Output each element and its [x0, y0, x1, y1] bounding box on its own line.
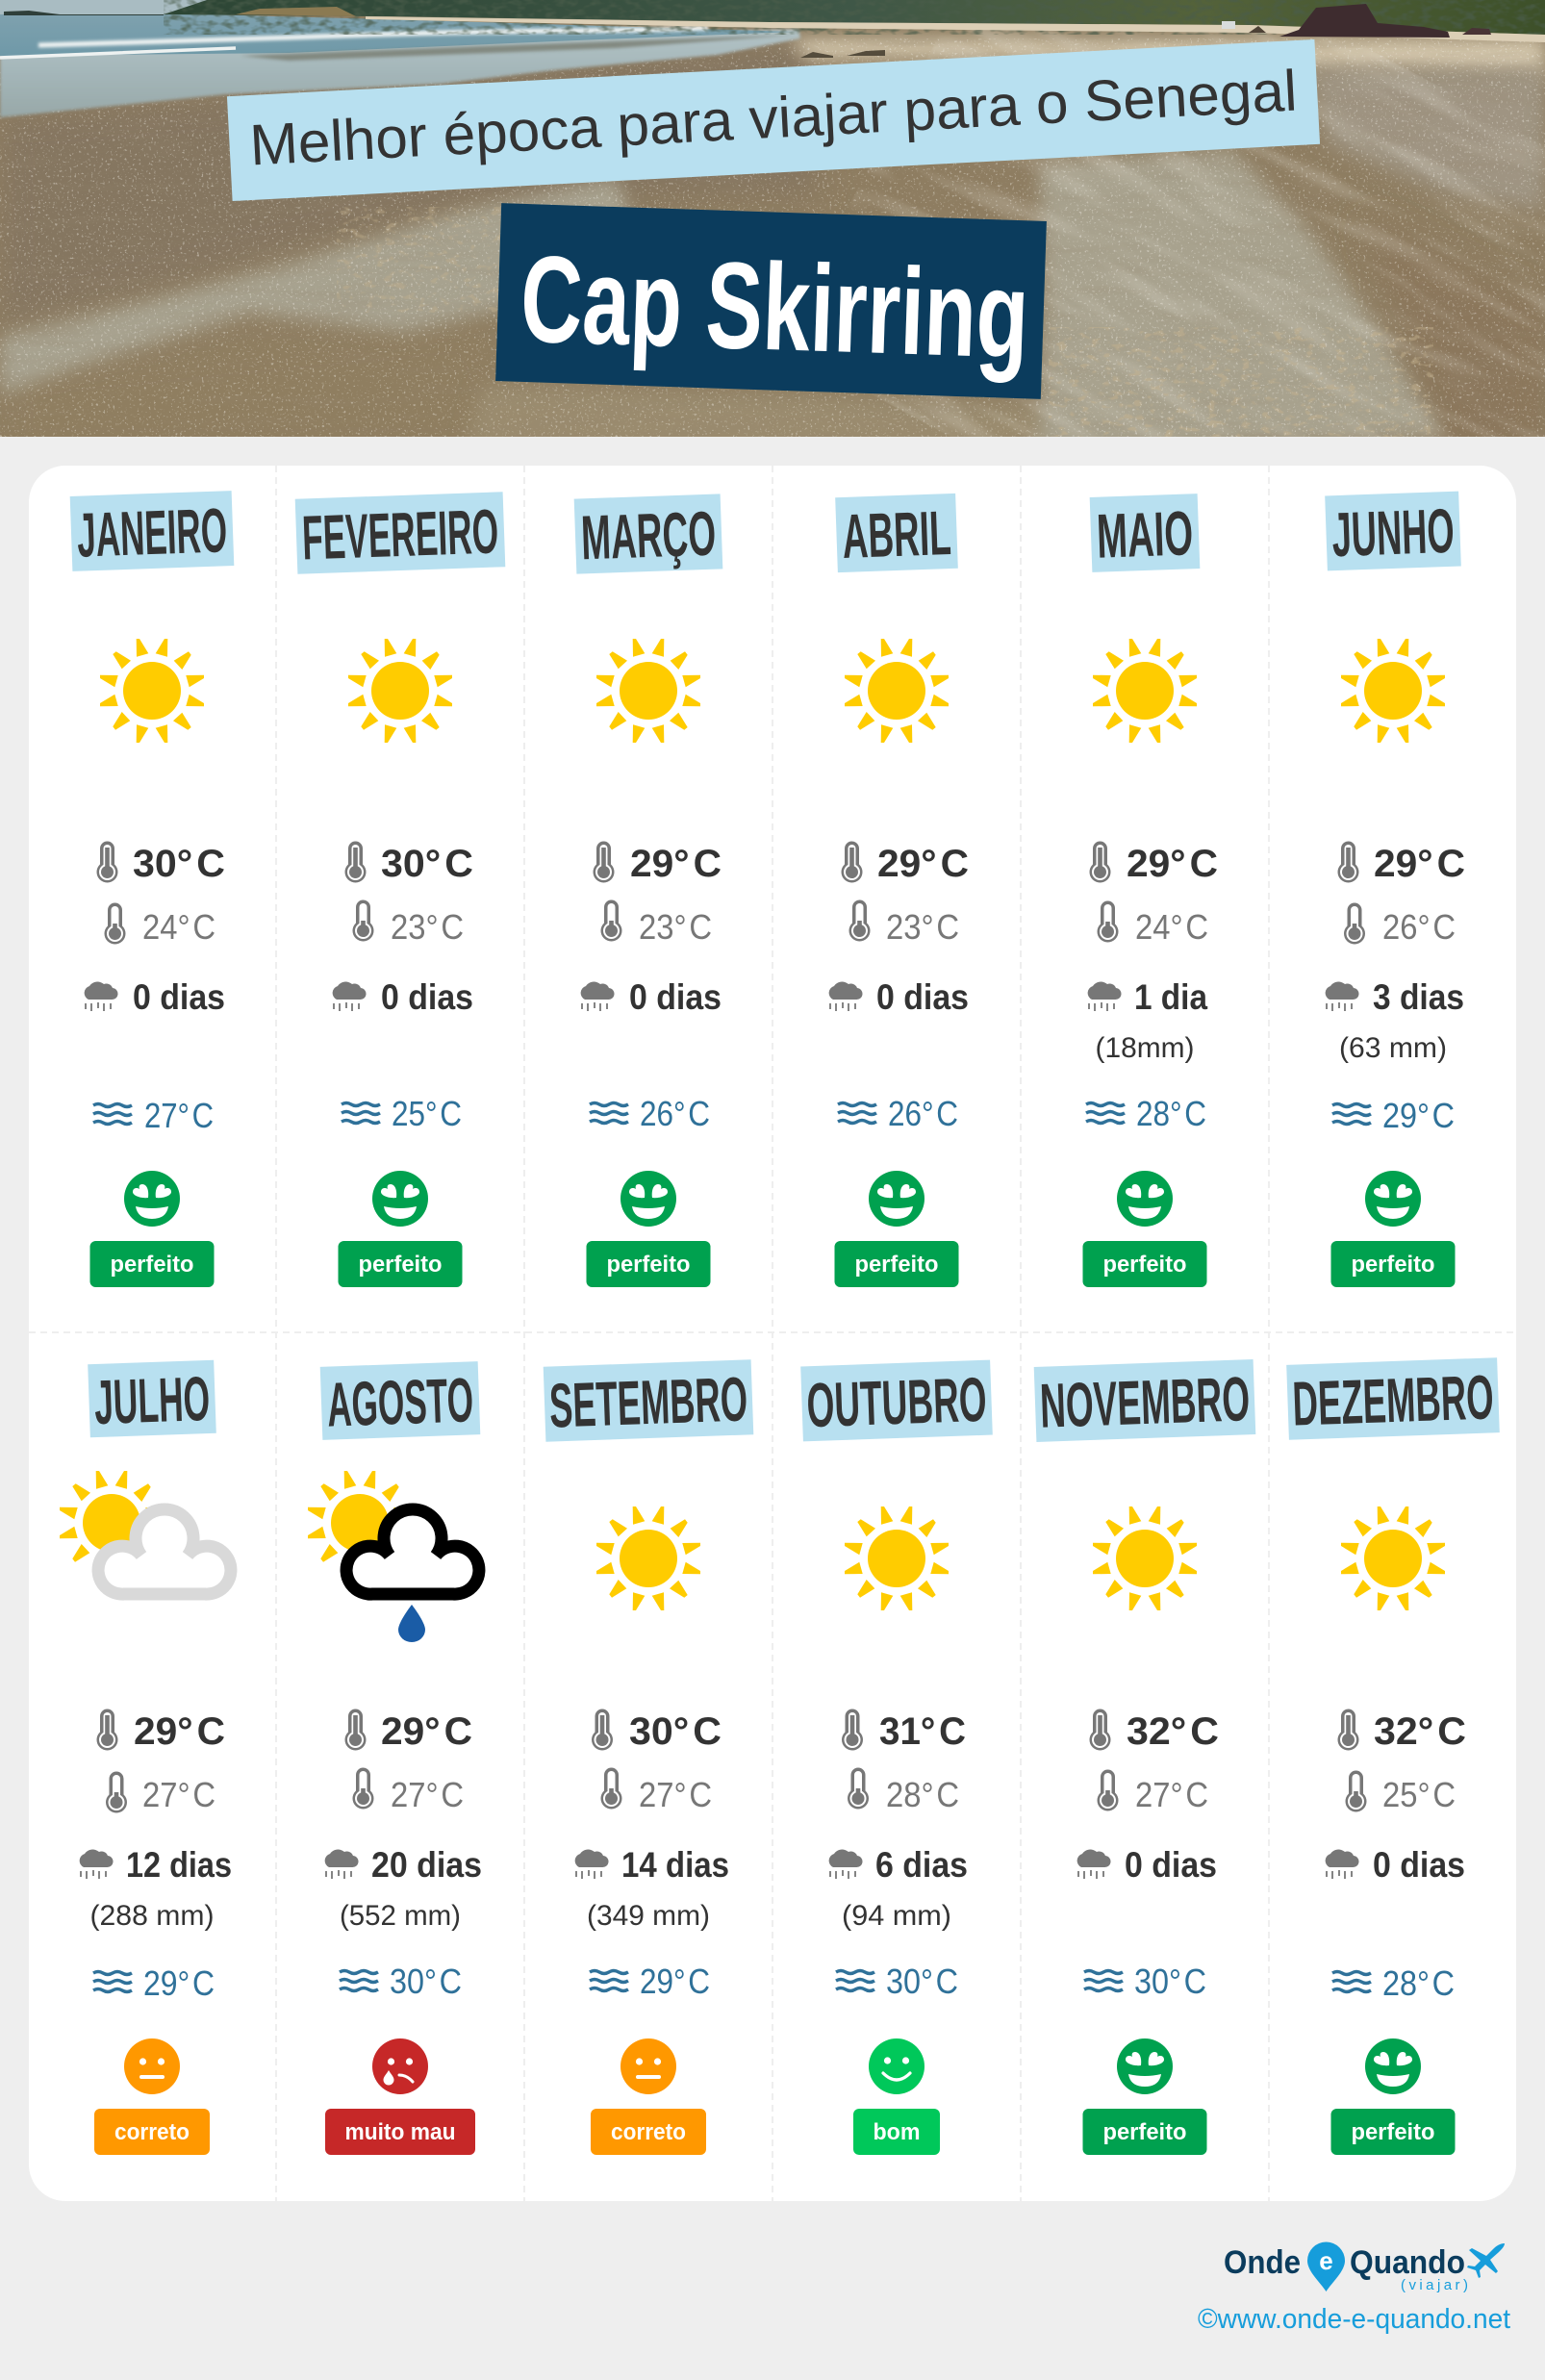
sea temperature [93, 1963, 215, 2003]
icon: sun, black cloud and rain drop [308, 1471, 479, 1642]
label: MARÇO: MARÇO [580, 498, 717, 572]
min temperature [600, 900, 712, 947]
label: FEVEREIRO [295, 492, 505, 574]
rating badge: perfeito [1083, 2109, 1206, 2155]
icon: map pin with e [1307, 2241, 1345, 2291]
month: dezembro [1286, 1357, 1500, 2155]
icon: sun [596, 1506, 700, 1610]
rating face [1365, 2038, 1421, 2094]
rating badge: perfeito [1083, 1241, 1206, 1287]
icon: sun [1093, 1506, 1197, 1610]
max temperature: 30°C [133, 843, 225, 885]
rain days [1326, 1845, 1465, 1885]
rating badge: correto: correto [114, 2119, 190, 2145]
icon: sun [1341, 639, 1445, 743]
rating badge: perfeito: perfeito [1102, 1252, 1187, 1278]
sea temperature [590, 1962, 710, 2001]
rating face [869, 2038, 924, 2094]
rain days [1088, 977, 1207, 1017]
logo word: Onde: Onde [1224, 2244, 1301, 2281]
label: FEVEREIRO: FEVEREIRO [301, 495, 499, 573]
rating badge: correto [94, 2109, 210, 2155]
min temperature: 24°C [1135, 907, 1208, 947]
rating badge: perfeito: perfeito [110, 1252, 194, 1278]
month: julho [60, 1360, 232, 2155]
heading: Cap Skirring: Cap Skirring [519, 230, 1031, 385]
max temperature [1337, 841, 1465, 885]
rain days [1077, 1845, 1217, 1885]
rating face [1365, 1171, 1421, 1227]
min temperature: 27°C [391, 1775, 464, 1814]
label: JANEIRO: JANEIRO [76, 494, 228, 570]
month: novembro [1034, 1359, 1255, 2155]
rain days [581, 977, 722, 1017]
sea temperature [1084, 1962, 1206, 2001]
sea temperature [342, 1094, 462, 1133]
sea temperature [590, 1094, 710, 1133]
max temperature: 32°C [1127, 1710, 1219, 1753]
min temperature: 23°C [391, 907, 464, 947]
rating badge: bom [853, 2109, 940, 2155]
max temperature: 29°C [630, 843, 722, 885]
max temperature [344, 1709, 472, 1753]
icon: sun [1093, 639, 1197, 743]
sea temperature: 30°C [390, 1962, 462, 2001]
rain amount: (288 mm) [90, 1900, 214, 1932]
rating face [869, 1171, 924, 1227]
rain days: 1 dia [1134, 977, 1207, 1017]
min temperature [848, 1768, 959, 1814]
rating face [372, 1171, 428, 1227]
label: ABRIL: ABRIL [841, 497, 952, 571]
max temperature [1089, 841, 1218, 885]
label: ABRIL [835, 494, 958, 572]
sea temperature [93, 1096, 214, 1135]
rain days [1326, 977, 1464, 1017]
rain days [85, 977, 225, 1017]
rating badge: perfeito: perfeito [1351, 1252, 1435, 1278]
website credit: ©www.onde-e-quando.net [1198, 2304, 1510, 2335]
rain days: 0 dias [876, 977, 969, 1017]
min temperature [1097, 900, 1208, 947]
icon: sun [596, 639, 700, 743]
max temperature [592, 1709, 722, 1753]
rating badge: perfeito [835, 1241, 958, 1287]
min temperature [848, 900, 959, 947]
label: MAIO: MAIO [1096, 497, 1194, 571]
sea temperature: 29°C [143, 1963, 215, 2003]
sea temperature: 28°C [1382, 1963, 1455, 2003]
rating face [1117, 2038, 1173, 2094]
month: março [574, 494, 722, 1287]
sea temperature: 26°C [640, 1094, 710, 1133]
label: AGOSTO [320, 1361, 480, 1440]
max temperature [96, 1709, 225, 1753]
rating badge: perfeito: perfeito [358, 1252, 443, 1278]
month: abril [829, 494, 969, 1287]
max temperature: 30°C [381, 843, 473, 885]
rain amount: (552 mm) [340, 1900, 461, 1932]
sea temperature [1332, 1096, 1455, 1135]
month: maio [1083, 494, 1218, 1287]
min temperature: 27°C [639, 1775, 712, 1814]
heading: Cap Skirring [495, 203, 1047, 399]
rating badge: perfeito: perfeito [854, 1252, 939, 1278]
rating face [621, 2038, 676, 2094]
rain days [575, 1845, 729, 1885]
label: AGOSTO: AGOSTO [326, 1364, 474, 1440]
rain days: 12 dias [126, 1845, 232, 1885]
icon: sun behind grey cloud [60, 1471, 231, 1594]
icon: sun [845, 639, 949, 743]
max temperature [1337, 1709, 1466, 1753]
rating face [1117, 1171, 1173, 1227]
month: janeiro [70, 491, 234, 1287]
rain amount: (94 mm) [842, 1900, 951, 1932]
rain days: 14 dias [621, 1845, 729, 1885]
sea temperature [836, 1962, 958, 2001]
icon: sun [1341, 1506, 1445, 1610]
rain days [829, 977, 969, 1017]
rain days: 0 dias [381, 977, 473, 1017]
label: NOVEMBRO: NOVEMBRO [1039, 1363, 1251, 1441]
min temperature: 25°C [1382, 1775, 1456, 1814]
sea temperature: 30°C [886, 1962, 958, 2001]
rating badge: perfeito: perfeito [606, 1252, 691, 1278]
icon: sun [845, 1506, 949, 1610]
rating badge: muito mau [325, 2109, 475, 2155]
label: OUTUBRO: OUTUBRO [805, 1364, 988, 1440]
label: SETEMBRO: SETEMBRO [548, 1363, 748, 1441]
logo: Onde e Quando viajar [1224, 2241, 1505, 2293]
header beach photo [0, 0, 1545, 437]
label: SETEMBRO [544, 1359, 753, 1442]
max temperature: 29°C [134, 1710, 225, 1753]
rating badge: correto: correto [611, 2119, 686, 2145]
min temperature: 26°C [1382, 907, 1456, 947]
logo tagline: viajar: (viajar) [1401, 2277, 1468, 2293]
min temperature: 27°C [1135, 1775, 1208, 1814]
sea temperature [340, 1962, 462, 2001]
rating face [124, 1171, 180, 1227]
icon: sun [348, 639, 452, 743]
min temperature: 23°C [639, 907, 712, 947]
month: agosto [308, 1361, 482, 2155]
rain amount: (349 mm) [587, 1900, 710, 1932]
rating badge: perfeito [90, 1241, 214, 1287]
sea temperature: 29°C [640, 1962, 710, 2001]
rating badge: perfeito: perfeito [1102, 2119, 1187, 2145]
rain days: 0 dias [133, 977, 225, 1017]
rain days: 0 dias [1373, 1845, 1465, 1885]
rain days: 0 dias [629, 977, 722, 1017]
rain days [829, 1845, 968, 1885]
label: MARÇO [574, 494, 722, 574]
rain days: 20 dias [371, 1845, 482, 1885]
max temperature: 29°C [381, 1710, 472, 1753]
sea temperature [838, 1094, 958, 1133]
min temperature: 24°C [142, 907, 215, 947]
max temperature [344, 841, 473, 885]
label: JUNHO [1325, 492, 1461, 570]
min temperature [106, 1772, 215, 1814]
sea temperature [1086, 1094, 1206, 1133]
rating face [124, 2038, 180, 2094]
label: JULHO [88, 1360, 216, 1437]
max temperature: 30°C [629, 1710, 722, 1753]
title strip: Melhor época para viajar para o Senegal: Melhor época para viajar para o Senegal [248, 59, 1299, 177]
min temperature: 28°C [886, 1775, 959, 1814]
rain amount: (63 mm) [1339, 1032, 1447, 1064]
label: OUTUBRO [800, 1360, 993, 1441]
min temperature: 27°C [142, 1775, 215, 1814]
sea temperature: 25°C [392, 1094, 462, 1133]
max temperature [96, 841, 225, 885]
icon: map pin with e: e [1319, 2246, 1333, 2275]
rating badge: perfeito [1331, 1241, 1455, 1287]
max temperature [593, 841, 722, 885]
icon: sun [100, 639, 204, 743]
sea temperature: 26°C [888, 1094, 958, 1133]
rating badge: perfeito: perfeito [1351, 2119, 1435, 2145]
min temperature [104, 902, 215, 947]
rain days: 0 dias [1125, 1845, 1217, 1885]
min temperature [352, 1768, 464, 1814]
max temperature: 29°C [1374, 843, 1465, 885]
label: JULHO: JULHO [93, 1363, 211, 1437]
rating badge: perfeito [587, 1241, 710, 1287]
rating face [372, 2038, 428, 2094]
rating badge: correto [591, 2109, 706, 2155]
month: setembro [544, 1359, 753, 2155]
icon: airplane [1467, 2243, 1505, 2278]
min temperature [1345, 1770, 1456, 1814]
sea temperature: 30°C [1134, 1962, 1206, 2001]
max temperature: 29°C [877, 843, 969, 885]
rain days: 3 dias [1373, 977, 1464, 1017]
rain days [333, 977, 473, 1017]
month: fevereiro [295, 492, 505, 1287]
max temperature [842, 1709, 966, 1753]
rating face [621, 1171, 676, 1227]
month: outubro [800, 1360, 993, 2155]
panel: monthly calendar [29, 466, 1516, 2201]
sea temperature: 28°C [1136, 1094, 1206, 1133]
label: NOVEMBRO [1034, 1359, 1255, 1442]
max temperature [841, 841, 969, 885]
max temperature: 29°C [1127, 843, 1218, 885]
min temperature [352, 900, 464, 947]
max temperature [1089, 1709, 1219, 1753]
sea temperature: 27°C [144, 1096, 214, 1135]
min temperature [1097, 1770, 1208, 1814]
sea temperature [1332, 1963, 1455, 2003]
min temperature [1344, 902, 1456, 947]
month: junho [1325, 492, 1465, 1287]
rating badge: perfeito [339, 1241, 462, 1287]
min temperature [600, 1768, 712, 1814]
max temperature: 32°C [1374, 1710, 1466, 1753]
rating badge: muito mau: muito mau [344, 2119, 456, 2145]
max temperature: 31°C [879, 1710, 966, 1753]
logo word: Quando: Quando [1350, 2244, 1465, 2281]
label: MAIO [1090, 494, 1200, 572]
label: JANEIRO [70, 491, 234, 571]
sea temperature: 29°C [1382, 1096, 1455, 1135]
min temperature: 23°C [886, 907, 959, 947]
rating badge: perfeito [1331, 2109, 1455, 2155]
rain days [80, 1845, 232, 1885]
rating badge: bom: bom [874, 2119, 920, 2145]
rain amount: (18mm) [1095, 1032, 1195, 1064]
rain days: 6 dias [875, 1845, 968, 1885]
rain days [325, 1845, 482, 1885]
